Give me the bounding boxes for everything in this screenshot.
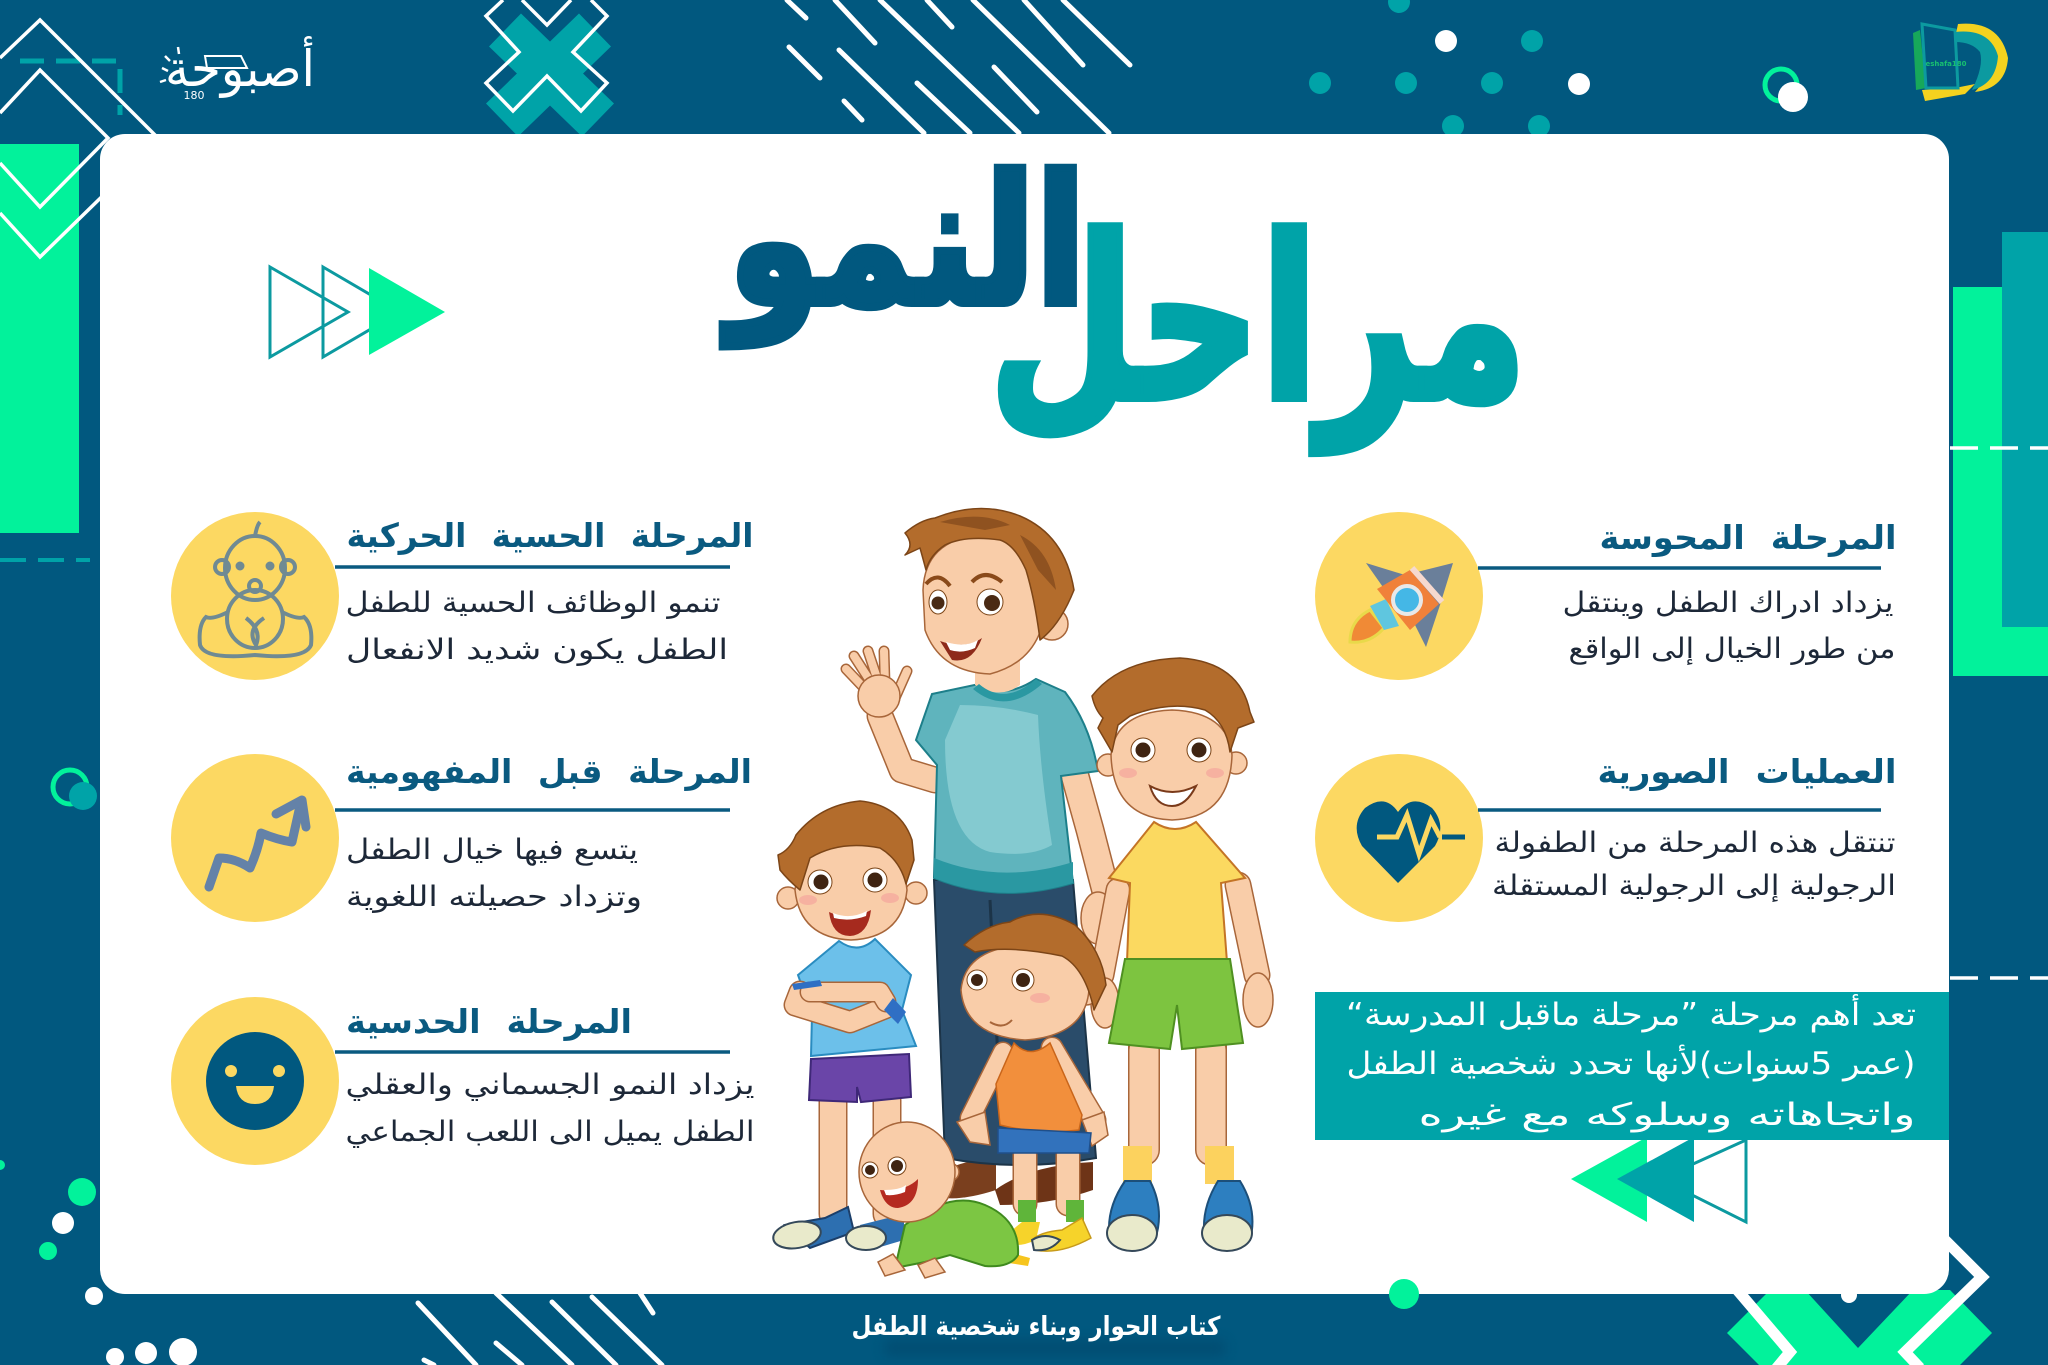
character: boy in yellow [1091,658,1273,1251]
body: يزداد ادراك الطفل وينتقل [1562,586,1894,619]
character: boy in blue [771,801,927,1252]
body: تنتقل هذه المرحلة من الطفولة [1494,826,1896,859]
callout: تعد أهم مرحلة ”مرحلة ماقبل المدرسة“ [1346,994,1916,1033]
title: النمو [721,138,1086,347]
diagonal lines top [787,0,1130,133]
body: يزداد النمو الجسماني والعقلي [346,1068,754,1101]
character: crawling baby [859,1122,1030,1278]
white panel [100,134,1949,1294]
heading: المرحلة الحدسية [346,1002,632,1042]
arrows bottom right [1571,1137,1746,1222]
body: الرجولية إلى الرجولية المستقلة [1492,869,1896,902]
callout [1315,992,1949,1140]
character: small boy in orange [957,914,1108,1251]
logo: book and wave [1913,24,2008,101]
arrows top left [270,267,445,357]
title [721,138,1527,454]
body: من طور الخيال إلى الواقع [1568,632,1896,665]
stage: preconceptual [171,752,752,922]
green dot on panel edge [1389,1279,1419,1309]
body [1492,826,1896,902]
body: الطفل يكون شديد الانفعال [346,633,728,666]
character: father [846,508,1115,1205]
body [346,833,642,913]
heading: العمليات الصورية [1598,752,1896,792]
icon: rising arrow [209,800,306,887]
icon: heart pulse [1357,801,1465,883]
heading: المرحلة الحسية الحركية [346,516,754,556]
left green bar [0,144,79,533]
right bars [1953,232,2048,676]
body [346,1068,754,1148]
callout: (عمر 5سنوات)لأنها تحدد شخصية الطفل [1346,1044,1916,1082]
body: وتزداد حصيلته اللغوية [346,880,642,913]
ring top [1765,69,1808,112]
logo: book and wave: eshafa180 [1925,60,1967,68]
heading: المرحلة المحوسة [1600,518,1896,558]
heading: المرحلة قبل المفهومية [346,752,752,792]
body: الطفل يميل الى اللعب الجماعي [346,1115,754,1148]
bottom right X ornament [1727,1240,1992,1365]
stage: intuitive [171,997,754,1165]
footer caption [852,1312,1225,1356]
icon: smiley [206,1032,304,1130]
callout: واتجاهاته وسلوكه مع غيره [1418,1097,1916,1133]
title: مراحل [989,189,1527,454]
body [1562,586,1896,665]
illustration: family of children [771,508,1273,1278]
stage: sensorimotor [171,512,754,680]
icon: rocket [1350,563,1453,647]
icon: baby [200,522,311,656]
stage: figurative operations [1315,752,1896,922]
logo: hand lettered name: 180 [184,89,204,102]
logo: hand lettered name: أصبوحة [165,36,315,98]
stage: sensed [1315,512,1896,680]
body [346,586,728,666]
dots top [1309,0,1590,137]
top-left chevrons [0,20,160,257]
top X ornament [486,0,607,120]
body: تنمو الوظائف الحسية للطفل [346,586,720,619]
left ornaments [0,770,197,1365]
footer caption: كتاب الحوار وبناء شخصية الطفل [852,1312,1221,1342]
bottom diagonal lines [418,1293,662,1365]
body: يتسع فيها خيال الطفل [346,833,638,866]
